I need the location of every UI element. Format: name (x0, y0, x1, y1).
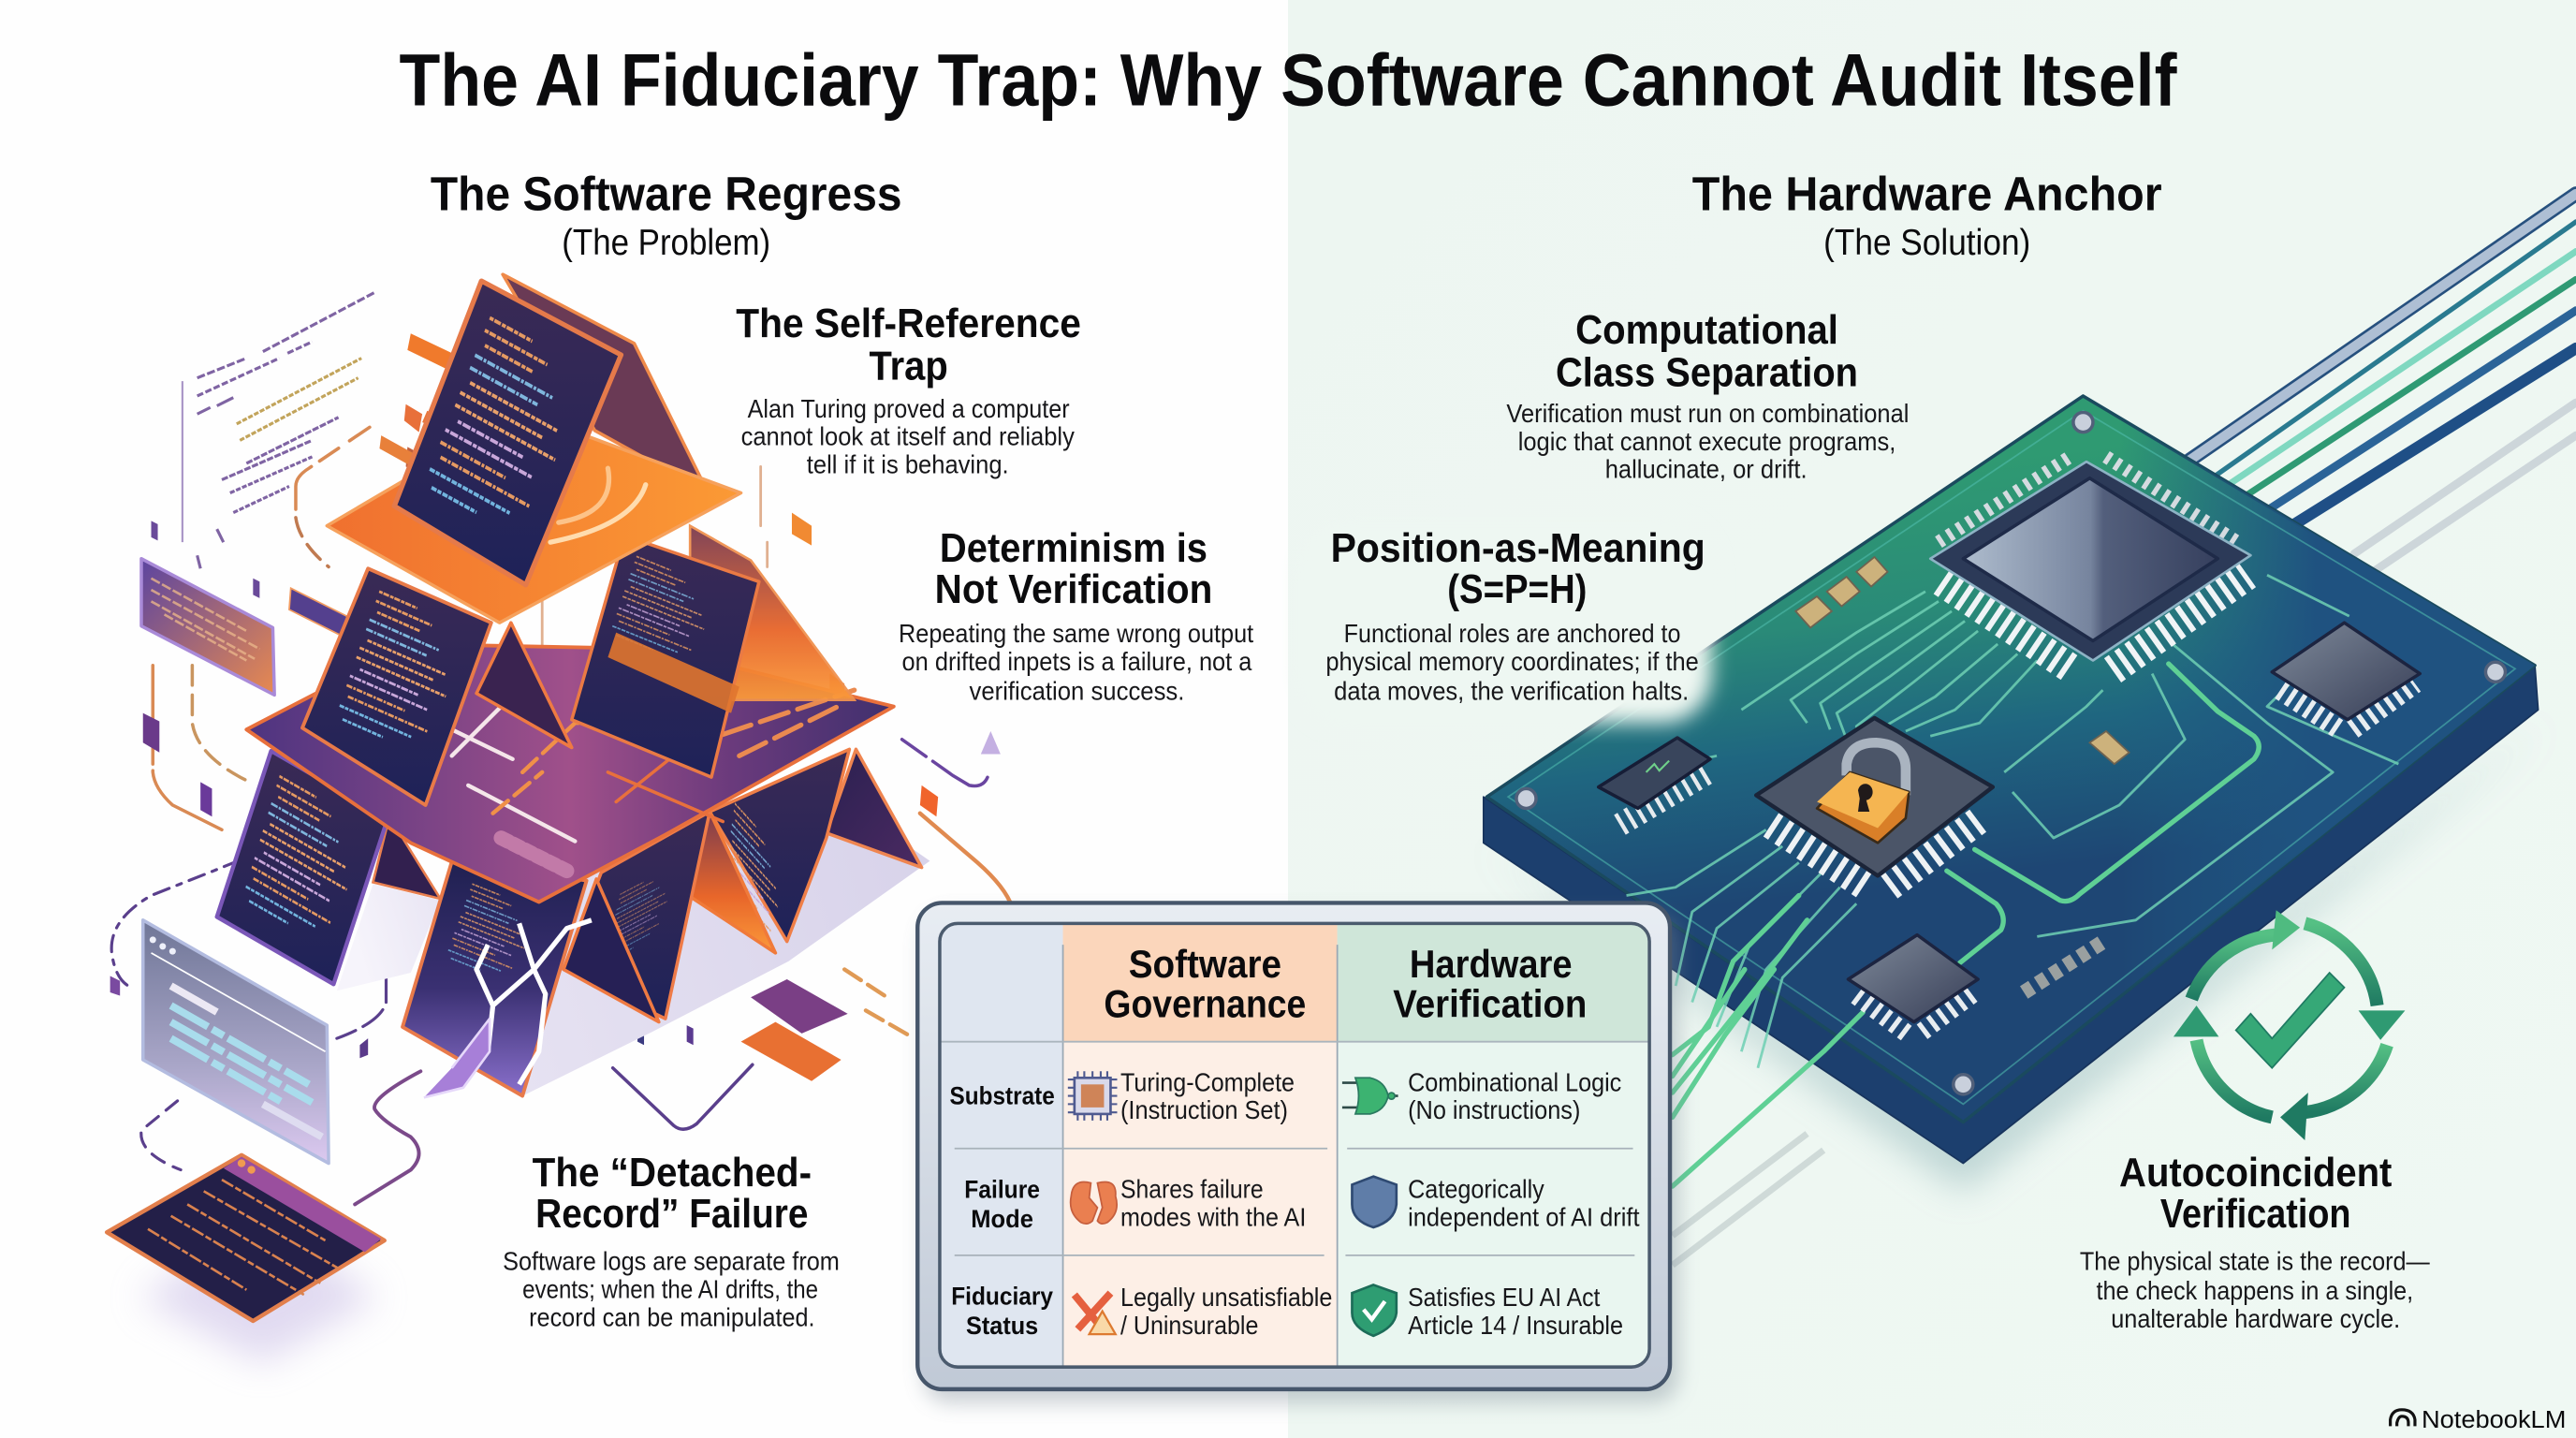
position-as-meaning text: (S=P=H) (1447, 566, 1587, 612)
rear top sail (503, 274, 708, 493)
icon: green shield check (1352, 1284, 1397, 1336)
detached record text: The “Detached- (533, 1150, 812, 1196)
software regress heading (431, 168, 902, 263)
bright green traces (1673, 664, 2259, 1186)
illustration: house of cards made of code (107, 274, 1012, 1364)
autocoincident verification text: unalterable hardware cycle. (2111, 1304, 2400, 1333)
ground plane (402, 788, 929, 1096)
upper right card (572, 536, 759, 777)
orange triangle (688, 812, 775, 953)
hardware failure text: Categorically (1408, 1174, 1544, 1203)
inset edge trace (1508, 411, 2515, 1104)
center triangle (564, 879, 659, 1022)
hardware status text (1408, 1283, 1623, 1340)
notebooklm badge: NotebookLM (2422, 1405, 2566, 1433)
row label: failure mode (964, 1174, 1040, 1233)
column header: software governance: Governance (1104, 981, 1306, 1025)
determinism text: Determinism is (940, 525, 1208, 571)
board soft shadow (1486, 723, 2546, 1191)
computational class separation text (1506, 307, 1909, 484)
debris panels (751, 979, 848, 1034)
software failure text: Shares failure (1120, 1174, 1264, 1203)
row label: fiduciary status: Status (966, 1311, 1038, 1340)
software status text: / Uninsurable (1120, 1311, 1258, 1340)
computational class separation text: Verification must run on combinational (1506, 399, 1909, 428)
rear orange sail (690, 526, 855, 700)
icon: fractured brain (1071, 1181, 1117, 1224)
hardware substrate text (1408, 1067, 1621, 1124)
swirl rings (550, 468, 646, 542)
icon: shield (1352, 1177, 1397, 1227)
lower wire shadows (1673, 1134, 1823, 1265)
lower right card (564, 812, 710, 1019)
padlock (1817, 742, 1909, 843)
lower chip pins (1856, 992, 1975, 1035)
center bottom card with crack (402, 856, 587, 1096)
row label: substrate: Substrate (949, 1080, 1055, 1109)
panel shadow (923, 914, 1679, 1403)
software substrate text: (Instruction Set) (1120, 1095, 1288, 1124)
right background (1288, 0, 2576, 1438)
hardware substrate text: Combinational Logic (1408, 1067, 1621, 1096)
dark terminal panel (107, 1155, 385, 1321)
right chip pins (2280, 683, 2415, 729)
flying fragments (110, 333, 938, 1058)
column header: hardware verification: Verification (1393, 981, 1587, 1025)
terminal dots (238, 1159, 256, 1174)
top card (394, 281, 621, 585)
autocoincident verification text: the check happens in a single, (2096, 1276, 2413, 1305)
software regress heading: (The Problem) (562, 223, 770, 263)
software failure text (1120, 1174, 1306, 1231)
position-as-meaning text: physical memory coordinates; if the (1325, 647, 1699, 676)
self-reference trap text (736, 301, 1081, 478)
computational class separation text: hallucinate, or drift. (1605, 455, 1808, 484)
autocoincident verification text: The physical state is the record— (2080, 1247, 2430, 1276)
terminal code (148, 1180, 339, 1295)
autocoincident verification text: Verification (2160, 1191, 2351, 1237)
screws (1516, 413, 2505, 1094)
row label: fiduciary status: Fiduciary (951, 1281, 1053, 1310)
hardware anchor heading: (The Solution) (1823, 223, 2030, 263)
resistor row (2024, 940, 2106, 992)
software substrate text: Turing-Complete (1120, 1067, 1295, 1096)
glass log window (143, 920, 329, 1164)
hardware status text: Article 14 / Insurable (1408, 1311, 1623, 1340)
table cell fills (940, 923, 1649, 1367)
computational class separation text: logic that cannot execute programs, (1518, 427, 1895, 456)
autocoincident verification text (2080, 1150, 2430, 1333)
hardware failure text: independent of AI drift (1408, 1202, 1640, 1231)
comparison table panel (917, 902, 1679, 1403)
outgoing wires top right (2190, 194, 2576, 570)
board blue overlay (1486, 396, 2535, 1123)
determinism text (899, 525, 1253, 706)
position-as-meaning text: Position-as-Meaning (1331, 525, 1705, 571)
pcb traces (1627, 575, 2398, 1068)
panel frame (917, 902, 1670, 1389)
software status text: Legally unsatisfiable (1120, 1283, 1332, 1312)
determinism text: Not Verification (935, 566, 1212, 612)
row label: fiduciary status (951, 1281, 1053, 1340)
row label: failure mode: Mode (971, 1204, 1033, 1233)
upper left triangle (476, 623, 572, 748)
detached record text: record can be manipulated. (529, 1302, 815, 1331)
self-reference trap text: The Self-Reference (736, 301, 1081, 346)
arrow head (981, 731, 1001, 755)
column header: hardware verification: Hardware (1410, 942, 1573, 986)
hardware substrate text: (No instructions) (1408, 1095, 1580, 1124)
hardware anchor heading (1692, 168, 2162, 263)
small tag (289, 588, 357, 642)
row label: failure mode: Failure (964, 1174, 1040, 1203)
hardware failure text (1408, 1174, 1640, 1231)
illustration: circuit board (1298, 194, 2576, 1265)
column header: hardware verification (1393, 942, 1587, 1025)
capacitors (1795, 557, 2130, 764)
detached record text: Record” Failure (535, 1191, 809, 1237)
lock chip (1756, 718, 1993, 875)
self-reference trap text: tell if it is behaving. (807, 449, 1009, 478)
terminal title bar (224, 1157, 381, 1252)
inner border (940, 923, 1649, 1367)
platform highlights (452, 690, 855, 871)
detached record text: events; when the AI drifts, the (522, 1274, 818, 1303)
small left ic (1599, 738, 1710, 825)
right chip (2272, 623, 2420, 720)
detached record text (503, 1150, 840, 1331)
mid platform (246, 644, 894, 902)
left background (0, 0, 1288, 1438)
hardware anchor heading: The Hardware Anchor (1692, 168, 2162, 221)
orange band on card (607, 633, 739, 713)
icon: cpu (1068, 1071, 1117, 1121)
lightning crack (424, 920, 592, 1097)
detached record text: Software logs are separate from (503, 1247, 840, 1276)
window bars (152, 953, 326, 1137)
right rear triangle (827, 749, 922, 868)
self-reference trap text: cannot look at itself and reliably (741, 422, 1075, 451)
determinism text: Repeating the same wrong output (899, 619, 1253, 648)
board side (1484, 666, 2539, 1164)
autocoincident verification text: Autocoincident (2119, 1150, 2393, 1196)
right rear card (710, 749, 849, 942)
main chip die (1963, 478, 2217, 640)
software substrate text (1120, 1067, 1295, 1124)
column header: software governance (1104, 942, 1306, 1025)
title: The AI Fiduciary Trap: Why Software Cannot Audit Itself (400, 38, 2177, 121)
lower chip (1848, 935, 1978, 1022)
halo behind position text (1298, 522, 1712, 723)
left bottom triangle (373, 816, 440, 899)
top platform (327, 431, 741, 623)
position-as-meaning text: data moves, the verification halts. (1334, 677, 1689, 706)
software failure text: modes with the AI (1120, 1202, 1306, 1231)
floating log panel (141, 559, 274, 695)
icon: logic gate (1342, 1078, 1398, 1114)
upper left card (302, 568, 491, 805)
connector dashes (111, 427, 1012, 1204)
computational class separation text: Class Separation (1556, 349, 1858, 395)
log panel code (152, 579, 259, 661)
left bottom card (217, 751, 388, 984)
software regress heading: The Software Regress (431, 168, 902, 221)
hardware status text: Satisfies EU AI Act (1408, 1283, 1601, 1312)
determinism text: verification success. (970, 677, 1184, 706)
self-reference trap text: Trap (869, 343, 948, 389)
floating code scrap (183, 292, 374, 568)
column header: software governance: Software (1129, 942, 1281, 986)
software status text (1120, 1283, 1332, 1340)
main chip pins (1939, 457, 2247, 670)
lock chip pins (1771, 818, 1982, 888)
left ground sliver (337, 884, 440, 990)
determinism text: on drifted inpets is a failure, not a (902, 647, 1252, 676)
icon: cross with warning (1075, 1293, 1116, 1334)
window dots (150, 936, 176, 955)
position-as-meaning text: Functional roles are anchored to (1344, 619, 1680, 648)
main chip package (1930, 462, 2250, 661)
position-as-meaning text (1325, 525, 1705, 706)
board top surface (1486, 396, 2535, 1123)
icon: verification cycle with check (2174, 910, 2405, 1140)
computational class separation text: Computational (1575, 307, 1838, 353)
dark terminal panel shadow (139, 1216, 378, 1364)
self-reference trap text: Alan Turing proved a computer (748, 394, 1070, 423)
